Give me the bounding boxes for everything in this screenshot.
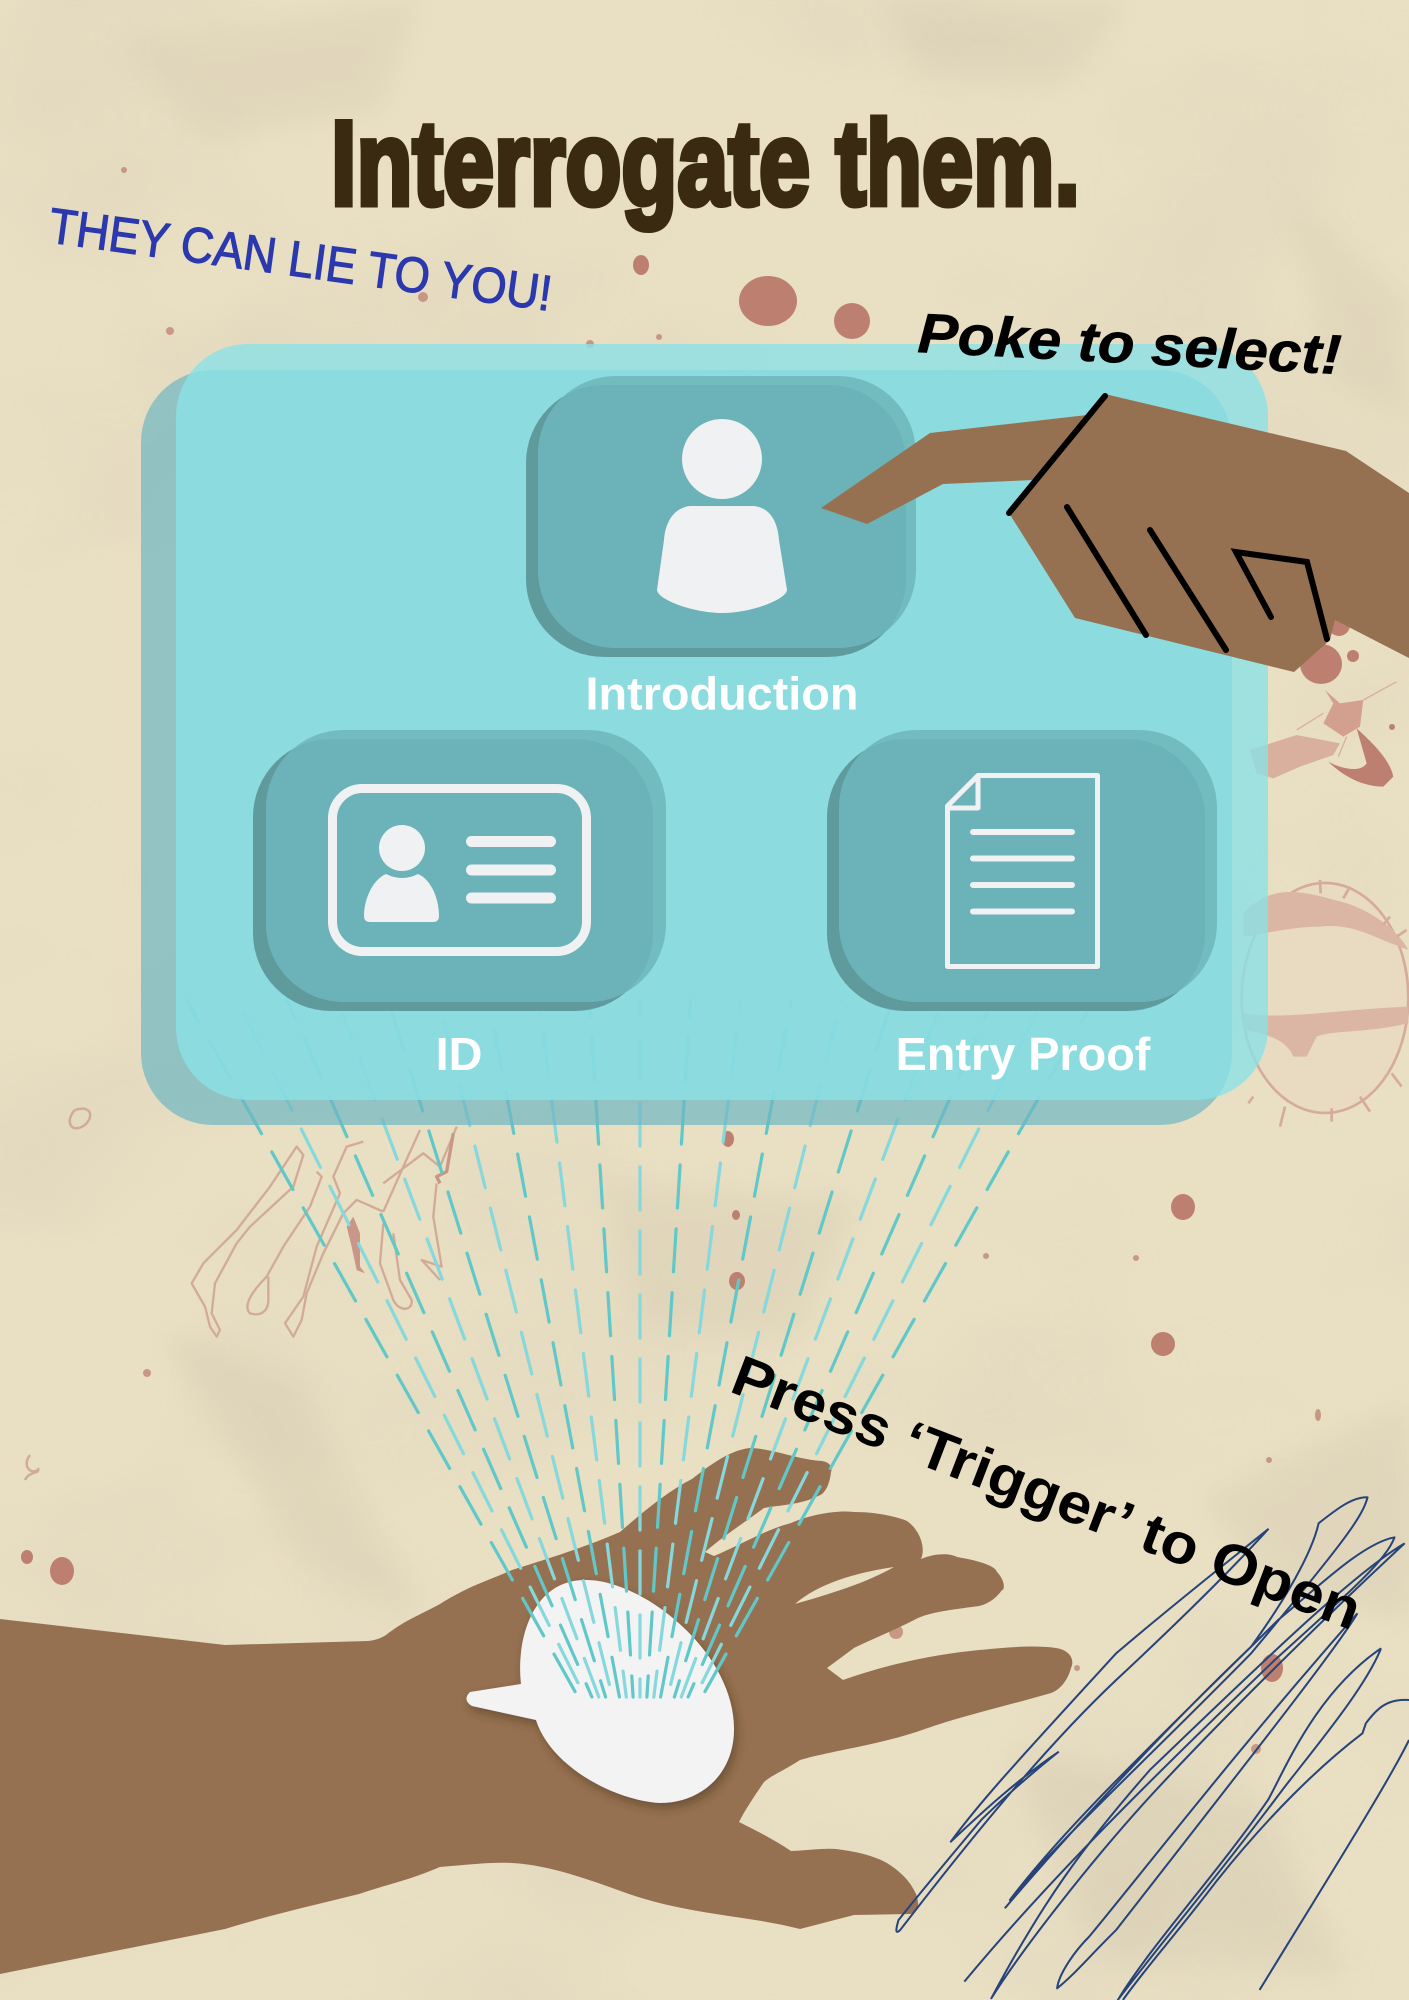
dashed scan rays [186,1000,1094,1697]
blood splatter [21,167,1395,1754]
label: Introduction: Introduction [586,668,858,720]
stain: drips [192,1127,457,1337]
gap between fingers [795,1567,894,1604]
icon: person [657,419,787,613]
stain: splash [1250,682,1397,787]
callout: poke to select: Poke to select! [916,301,1343,386]
stain: ring [1242,880,1408,1127]
label: ID: ID [436,1028,482,1080]
stain: small loops [25,1109,90,1480]
speech bubble [466,1580,734,1803]
callout: they can lie: THEY CAN LIE TO YOU! [46,197,555,322]
title: Interrogate them. [331,96,1080,230]
menu button: Introduction [526,376,916,720]
icon: document [948,776,1098,966]
callout: press trigger to open: Press ‘Trigger’ to Open [723,1343,1370,1643]
panel: back shadow [141,370,1232,1125]
panel: front menu [176,344,1268,1100]
icon: id card [332,788,586,952]
label: Entry Proof: Entry Proof [896,1028,1151,1080]
hand: poking finger [821,394,1409,672]
menu button: ID [253,730,666,1080]
menu button: Entry Proof [827,730,1217,1080]
scribble [896,1497,1409,2000]
hand: open palm [0,1448,1072,1974]
